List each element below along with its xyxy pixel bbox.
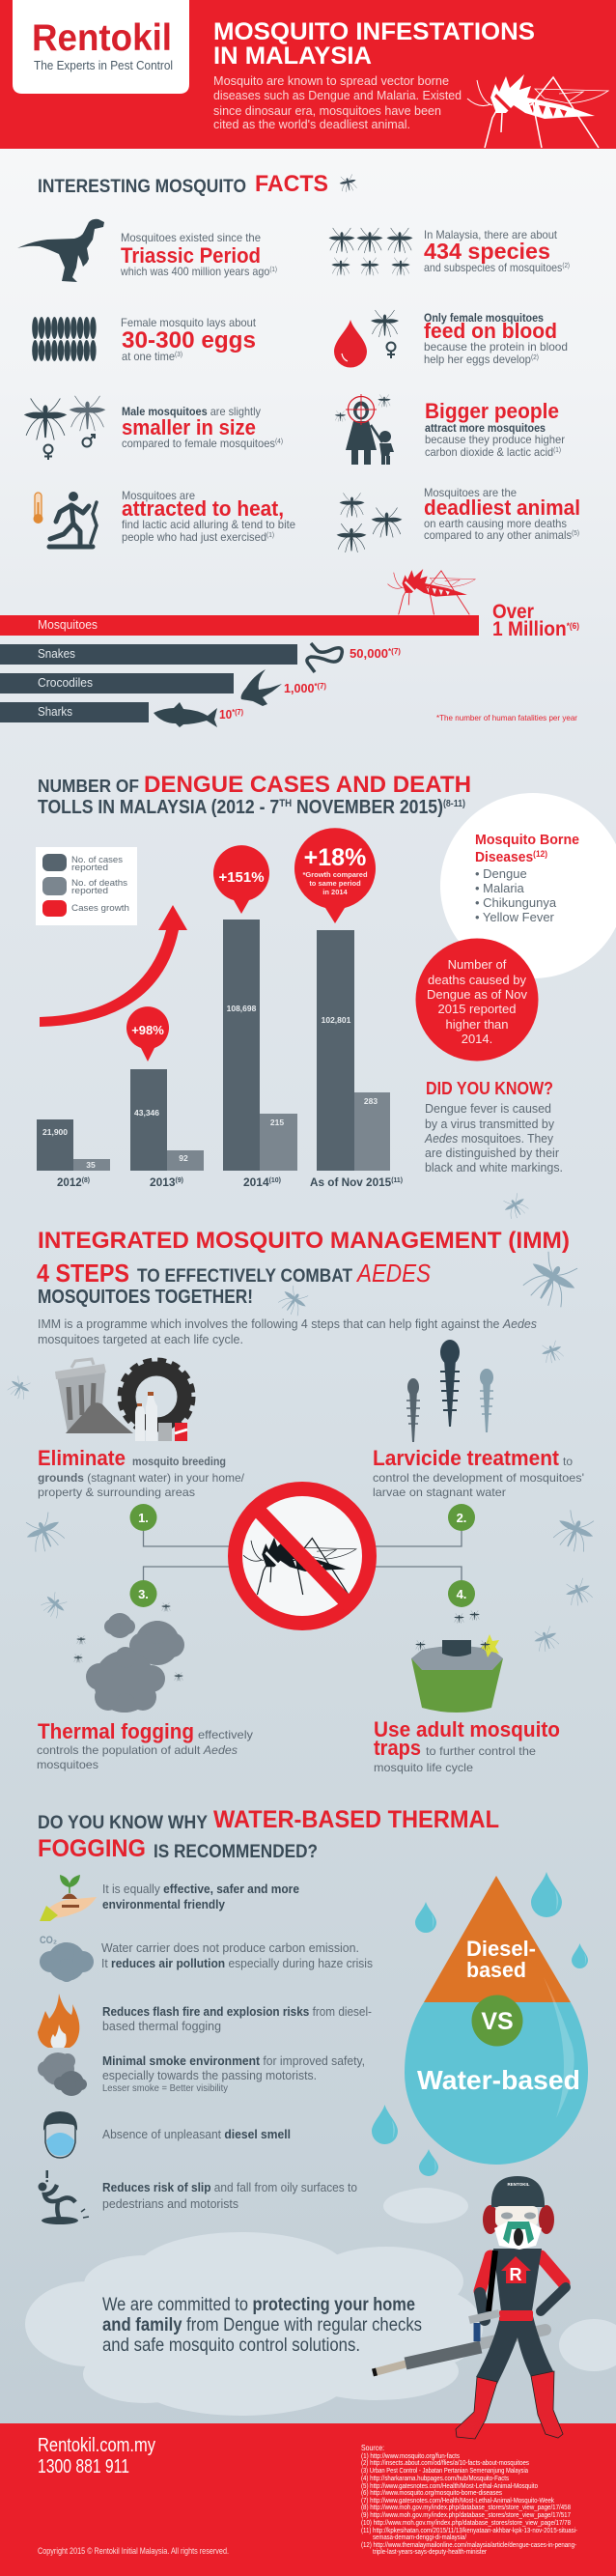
benefit: minimal smoke: Minimal smoke environment for improved safety, (102, 2053, 365, 2068)
heading: water-based fogging: IS RECOMMENDED? (154, 1842, 318, 1862)
text block: did you know: by a virus transmitted by (425, 1117, 554, 1131)
bar: snakes: *(7) (388, 647, 401, 656)
fact: smaller in size: (4) (275, 439, 283, 445)
benefit: minimal smoke (38, 2052, 365, 2096)
benefit: air pollution (40, 1935, 373, 1982)
legend: Cases growth (71, 903, 129, 914)
fact: 30-300 eggs: Female mosquito lays about (121, 316, 257, 329)
benefit: flash fire: Reduces flash fire and explosion risks from diesel- (102, 2004, 372, 2019)
sources: (3) Urban Pest Control - Jabatan Pertanian Semenanjung Malaysia (361, 2468, 528, 2475)
icon: runner on treadmill (49, 492, 97, 547)
benefit: flash fire (38, 1994, 372, 2048)
sources: (11) http://kpkesihatan.com/2015/11/13/kenyataan-akhbar-kpk-13-nov-2015-situasi- (361, 2528, 578, 2534)
icon: three mosquitoes (337, 493, 402, 552)
fact: feed on blood: (2) (531, 354, 539, 361)
heading: IMM: INTEGRATED MOSQUITO MANAGEMENT (IMM) (38, 1228, 570, 1254)
bubble: +18%: *Growth compared (302, 870, 368, 879)
callout: deaths caused by dengue: higher than (445, 1017, 509, 1032)
fact: 434 species (328, 228, 570, 275)
fact: attracted to heat (33, 489, 295, 547)
intro text: since dinosaur era, mosquitoes have been (213, 103, 441, 118)
panel: mosquito borne diseases (440, 793, 616, 978)
legend: reported (71, 863, 108, 873)
bar: sharks: *(7) (232, 708, 243, 717)
arrow: rising trend (40, 905, 187, 1027)
connector lines (143, 1531, 462, 1580)
sources: (8) http://www.moh.gov.my/index.php/database_stores/store_view_page/17/458 (361, 2505, 571, 2511)
text block: did you know: black and white markings. (425, 1160, 563, 1175)
fact: attracted to heat: (1) (266, 532, 274, 539)
heading: interesting mosquito facts: INTERESTING MOSQUITO (38, 177, 246, 197)
fact: attracted to heat: find lactic acid alluring & tend to bite (122, 518, 295, 531)
icon: woman and child target (335, 394, 394, 465)
belt (499, 2310, 533, 2321)
heading: dengue cases: TOLLS IN MALAYSIA (2012 - 7 (38, 797, 312, 818)
contact details (38, 2435, 155, 2477)
bar: sharks (0, 702, 243, 727)
bar: mosquitoes: Mosquitoes (38, 617, 98, 632)
fact: 434 species: (2) (562, 263, 570, 269)
bars 2014: 215 (270, 1118, 284, 1127)
sources: (10) http://www.moh.gov.my/index.php/database_stores/store_view_page/17/78 (361, 2520, 571, 2527)
icon: hand with plant (40, 1875, 97, 1921)
step number 2 (448, 1504, 475, 1531)
bar: mosquitoes: 1 Million (492, 618, 574, 640)
bars 2014: 2014 (243, 1175, 269, 1189)
heading: IMM: 4 STEPS (37, 1259, 129, 1288)
heading: water-based fogging: DO YOU KNOW WHY (38, 1813, 208, 1833)
footer (0, 2423, 616, 2576)
bubble: +18%: +18% (304, 844, 366, 871)
bars 2014: 108,698 (227, 1004, 257, 1013)
step number 3: 3. (138, 1587, 149, 1601)
bubble: +98% (126, 1006, 169, 1062)
callout: deaths caused by dengue (415, 939, 539, 1061)
benefit: slip risk (39, 2170, 357, 2224)
bars 2012: (8) (82, 1177, 90, 1184)
benefit: minimal smoke: especially towards the passing motorists. (102, 2068, 317, 2082)
icon: CO2 cloud (40, 1935, 94, 1982)
icon: person slipping (39, 2170, 89, 2224)
icon: CO2 cloud: CO₂ (40, 1935, 57, 1946)
panel: mosquito borne diseases: • Dengue (475, 866, 527, 881)
text block: did you know: Dengue fever is caused (425, 1101, 551, 1116)
bars 2013: 43,346 (134, 1108, 159, 1118)
arms (480, 2256, 566, 2320)
icon: white mosquito (467, 74, 608, 148)
legs (476, 2316, 554, 2384)
bar: sharks: 10 (219, 707, 233, 722)
chart: dengue cases and deaths (37, 828, 403, 1189)
bar: sharks: Sharks (38, 704, 72, 719)
header banner (0, 0, 616, 149)
text block: did you know: are distinguished by their (425, 1146, 560, 1160)
fact: 30-300 eggs: at one time (122, 350, 179, 363)
bars 2015: 283 (364, 1096, 378, 1106)
bars 2015: 102,801 (322, 1015, 351, 1025)
bars 2015: (11) (391, 1177, 403, 1184)
step text: eliminate: grounds (stagnant water) in your home/ (38, 1471, 245, 1485)
fact: attracted to heat: people who had just exercised (122, 530, 277, 544)
fact: smaller in size (24, 396, 283, 460)
step number 4: 4. (457, 1587, 466, 1601)
fact: attracted to heat: attracted to heat, (122, 496, 284, 521)
bar: mosquitoes (0, 569, 579, 640)
badge: VS (471, 1996, 523, 2046)
icon: flame (38, 1994, 79, 2048)
label: water-based: Water-based (417, 2065, 580, 2095)
icon: fog clouds (73, 1602, 184, 1713)
logo card: The Experts in Pest Control (34, 58, 173, 72)
fact: feed on blood: Only female mosquitoes (424, 311, 544, 325)
icon: face mask (43, 2111, 77, 2158)
clouds background (25, 2188, 616, 2416)
fact: smaller in size: Male mosquitoes are slightly (122, 405, 261, 418)
text block: did you know (424, 1079, 563, 1175)
badge: VS: VS (481, 2008, 514, 2035)
fact: deadliest animal: deadliest animal (424, 495, 580, 520)
decorative mosquitoes (6, 1192, 599, 1654)
heading: water-based fogging (38, 1806, 499, 1862)
icon: no mosquito sign (236, 1489, 369, 1623)
heading: dengue cases: (8-11) (443, 799, 465, 809)
panel: mosquito borne diseases: • Malaria (475, 881, 525, 895)
sources: (5) http://www.gatesnotes.com/Health/Most-Lethal-Animal-Mosquito (361, 2483, 538, 2490)
closing statement: and safe mosquito control solutions. (102, 2335, 360, 2356)
bar: crocodiles (0, 669, 326, 706)
step number 4 (448, 1580, 475, 1607)
benefit: no diesel smell (43, 2111, 291, 2158)
fact: bigger people: attract more mosquitoes (425, 421, 546, 435)
sources: (2) http://insects.about.com/od/flies/a/10-facts-about-mosquitoes (361, 2460, 529, 2467)
text block: IMM intro: IMM is a programme which involves the following 4 steps that can help fight against the Aedes (38, 1316, 537, 1331)
label: diesel-based: Diesel- (466, 1937, 536, 1961)
step number 1 (129, 1504, 156, 1531)
step number 1: 1. (138, 1511, 149, 1525)
step text: eliminate: property & surrounding areas (38, 1486, 195, 1499)
bar chart: human fatalities per year (0, 569, 579, 727)
text block: did you know: Aedes mosquitoes. They (424, 1131, 553, 1146)
copyright: Copyright 2015 © Rentokil Initial Malaysia. All rights reserved. (38, 2546, 229, 2557)
text block: IMM intro (38, 1316, 537, 1346)
step text: eliminate: Eliminate (38, 1446, 126, 1470)
panel: mosquito borne diseases: (12) (533, 849, 547, 859)
bars 2013: 92 (179, 1153, 188, 1163)
fact: bigger people (335, 394, 565, 465)
sources: (4) http://sharkarama.hubpages.com/hub/Mosquito-Facts (361, 2476, 509, 2482)
bar: snakes (0, 643, 401, 672)
bars 2014: (10) (269, 1177, 281, 1184)
step text: thermal fogging: effectively (198, 1728, 253, 1741)
icon: smoke (38, 2052, 87, 2096)
fact: deadliest animal: (5) (572, 530, 579, 537)
step text: adult traps: traps (374, 1736, 421, 1760)
heading: IMM: MOSQUITOES TOGETHER! (38, 1287, 253, 1308)
head and helmet: RENTOKIL (508, 2182, 530, 2187)
step text: adult traps (374, 1717, 560, 1774)
intro text: diseases such as Dengue and Malaria. Existed (213, 88, 462, 102)
step text: eliminate (38, 1446, 245, 1499)
bubble: +151%: +151% (218, 869, 265, 886)
label: diesel-based: based (466, 1958, 526, 1982)
fact: triassic period (17, 219, 277, 282)
callout: deaths caused by dengue: Dengue as of Nov (427, 987, 528, 1002)
icon: blood drop (334, 320, 367, 367)
panel: mosquito borne diseases: Mosquito Borne (475, 832, 579, 848)
intro text: Mosquito are known to spread vector borne (213, 73, 449, 88)
bar: mosquitoes: *(6) (567, 621, 579, 631)
legend (36, 847, 137, 925)
heading: dengue cases: NUMBER OF (38, 777, 139, 796)
bars 2012: 35 (86, 1160, 96, 1170)
icon: rubbish bin, tyre and bottles (55, 1359, 193, 1441)
text block: did you know: DID YOU KNOW? (426, 1079, 553, 1098)
bar: crocodiles: *(7) (315, 682, 326, 691)
step text: larvicide (373, 1446, 584, 1499)
logo card: Rentokil (32, 17, 172, 59)
sources (361, 2443, 578, 2556)
fact: 434 species: and subspecies of mosquitoes (424, 261, 579, 274)
sources: (7) http://www.gatesnotes.com/Health/Most-Lethal-Animal-Mosquito-Week (361, 2498, 554, 2505)
fact: triassic period: Triassic Period (121, 243, 261, 268)
benefit: slip risk: Reduces risk of slip and fall from oily surfaces to (102, 2180, 357, 2194)
fact: bigger people: Bigger people (425, 399, 559, 423)
footnote: *The number of human fatalities per year (436, 713, 577, 722)
panel: mosquito borne diseases: Diseases (475, 849, 538, 865)
callout: deaths caused by dengue: Number of (448, 957, 507, 972)
title (213, 18, 535, 70)
bars 2012: 2012 (57, 1175, 83, 1189)
icon: small water drops (372, 1872, 588, 2176)
fact: triassic period: which was 400 million years ago (121, 265, 287, 278)
icon: eggs (32, 317, 97, 361)
contact details: 1300 881 911 (38, 2456, 129, 2477)
icon: larvae (406, 1340, 493, 1442)
step text: adult traps: mosquito life cycle (374, 1761, 473, 1774)
benefit: environmental: environmental friendly (102, 1897, 226, 1911)
fact: bigger people: (1) (553, 447, 561, 454)
step text: larvicide: to (563, 1455, 573, 1468)
heading: water-based fogging: WATER-BASED THERMAL (213, 1806, 499, 1833)
title: MOSQUITO INFESTATIONS (213, 18, 535, 45)
fact: deadliest animal: Mosquitoes are the (424, 486, 517, 499)
sources: (9) http://www.moh.gov.my/index.php/database_stores/store_view_page/17/517 (361, 2512, 571, 2519)
bars 2014 (223, 920, 297, 1189)
bars 2015: As of Nov 2015 (310, 1175, 393, 1189)
heading: IMM (37, 1228, 570, 1308)
benefit: no diesel smell: Absence of unpleasant diesel smell (102, 2127, 291, 2141)
heading: dengue cases (38, 772, 471, 818)
legend: No. of cases (71, 855, 123, 865)
fact: triassic period: Mosquitoes existed since the (121, 231, 261, 244)
bar: crocodiles: 1,000 (284, 681, 316, 695)
step text: thermal fogging: controls the population of adult Aedes (37, 1743, 238, 1757)
panel: mosquito borne diseases: • Yellow Fever (475, 910, 555, 924)
benefit: flash fire: based thermal fogging (102, 2019, 221, 2033)
fact: feed on blood (334, 310, 568, 367)
bars 2013 (130, 1069, 204, 1189)
step number 3 (129, 1580, 156, 1607)
heading: interesting mosquito facts (38, 171, 358, 197)
heading: dengue cases: DENGUE CASES AND DEATH (144, 772, 471, 798)
fogger nozzle (373, 2347, 481, 2372)
step text: eliminate: mosquito breeding (132, 1455, 226, 1468)
bar: snakes: 50,000 (350, 646, 388, 661)
fogger tank (479, 2330, 546, 2344)
benefit: air pollution: Water carrier does not produce carbon emission. (101, 1940, 359, 1955)
bar: crocodiles: Crocodiles (38, 675, 93, 690)
fact: feed on blood: feed on blood (424, 319, 557, 343)
heading: water-based fogging: FOGGING (38, 1835, 146, 1862)
bubble: +18%: to same period (309, 879, 361, 888)
bars 2015 (310, 930, 403, 1189)
bar: mosquitoes: Over (492, 601, 534, 623)
fact: deadliest animal (337, 486, 580, 552)
fact: smaller in size: smaller in size (122, 415, 256, 439)
icon: dinosaur (17, 219, 104, 282)
torso (493, 2249, 542, 2311)
panel: mosquito borne diseases: • Chikungunya (475, 895, 557, 910)
fogger handle (469, 2313, 499, 2341)
fact: feed on blood: because the protein in blood (424, 340, 568, 354)
heading: IMM: AEDES (355, 1259, 432, 1288)
fact: deadliest animal: compared to any other animals (424, 528, 583, 542)
fact: attracted to heat: Mosquitoes are (122, 489, 195, 502)
heading: interesting mosquito facts: FACTS (255, 171, 328, 197)
illustration: pest controller with fogger (373, 2176, 566, 2439)
fact: 434 species: 434 species (424, 239, 550, 264)
icon: mosquito trap (411, 1610, 503, 1713)
callout: deaths caused by dengue: 2014. (462, 1032, 492, 1046)
step text: adult traps: Use adult mosquito (374, 1717, 560, 1741)
bars 2013: 2013 (150, 1175, 176, 1189)
chart: diesel vs water drop (405, 1876, 588, 2165)
heading: IMM: TO EFFECTIVELY COMBAT (137, 1266, 352, 1287)
fact: 30-300 eggs (32, 316, 257, 363)
head and helmet (483, 2176, 554, 2250)
bars 2012 (37, 1119, 110, 1189)
label: diesel-based (466, 1937, 536, 1982)
fact: triassic period: (1) (269, 267, 277, 273)
bubble: +98%: +98% (131, 1023, 164, 1037)
sources: Source: (361, 2443, 384, 2452)
heading: dengue cases: NOVEMBER 2015) (292, 797, 443, 818)
fact: feed on blood: help her eggs develop (424, 353, 538, 366)
fact: deadliest animal: on earth causing more deaths (424, 517, 567, 530)
step text: adult traps: to further control the (426, 1744, 536, 1758)
sources: (1) http://www.mosquito.org/fun-facts (361, 2453, 460, 2460)
benefit: air pollution: It reduces air pollution especially during haze crisis (101, 1956, 373, 1970)
bubble: +151% (213, 845, 269, 914)
house logo: R (510, 2265, 521, 2284)
bars 2012: 21,900 (42, 1127, 68, 1137)
sources: (6) http://www.mosquito.org/mosquito-borne-diseases (361, 2490, 502, 2497)
boots (456, 2371, 563, 2439)
step text: larvicide: larvae on stagnant water (373, 1486, 506, 1499)
bubble: +18%: in 2014 (322, 888, 349, 896)
step number 2: 2. (457, 1511, 466, 1525)
bars 2013: (9) (176, 1177, 183, 1184)
strap (489, 2250, 495, 2311)
step text: larvicide: control the development of mosquitoes' (373, 1471, 584, 1485)
fact: 30-300 eggs: 30-300 eggs (122, 327, 256, 354)
bubble: +18% (294, 828, 376, 923)
legend: reported (71, 886, 108, 896)
step text: thermal fogging (37, 1719, 253, 1771)
step text: larvicide: Larvicide treatment (373, 1446, 560, 1470)
fact: 30-300 eggs: (3) (175, 352, 182, 358)
bar: snakes: Snakes (38, 646, 75, 661)
step text: thermal fogging: Thermal fogging (38, 1719, 194, 1743)
fact: 434 species: In Malaysia, there are about (424, 228, 558, 241)
intro text: cited as the world's deadliest animal. (213, 117, 410, 131)
sources: (12) http://www.themalaymailonline.com/malaysia/article/dengue-cases-in-penang- (361, 2542, 577, 2549)
fact: bigger people: carbon dioxide & lactic acid (425, 445, 565, 459)
house logo (501, 2256, 531, 2284)
closing statement: and family from Dengue with regular checks (102, 2315, 422, 2335)
callout: deaths caused by dengue: 2015 reported (438, 1002, 516, 1016)
benefit: slip risk: pedestrians and motorists (102, 2196, 238, 2211)
sources: semasa-demam-denggi-di-malaysia/ (373, 2534, 466, 2541)
icon: six mosquitoes (328, 228, 413, 275)
closing statement (102, 2295, 422, 2356)
contact details: Rentokil.com.my (38, 2435, 155, 2456)
callout: deaths caused by dengue: deaths caused by (428, 973, 526, 987)
benefit: minimal smoke: Lesser smoke = Better visibility (102, 2083, 228, 2094)
fact: smaller in size: compared to female mosquitoes (122, 437, 287, 450)
icon: thermometer (33, 493, 42, 524)
closing statement: We are committed to protecting your home (102, 2295, 415, 2315)
step text: thermal fogging: mosquitoes (37, 1758, 98, 1771)
icon: female mosquito (371, 310, 399, 358)
benefit: environmental: It is equally effective, safer and more (102, 1882, 299, 1896)
title: IN MALAYSIA (213, 42, 372, 70)
sources: triple-last-years-says-deputy-health-minister (373, 2549, 488, 2556)
icon: male and female mosquitoes (24, 396, 105, 460)
text block: IMM intro: mosquitoes targeted at each life cycle. (38, 1332, 243, 1346)
fact: bigger people: because they produce higher (425, 433, 565, 446)
intro text (213, 73, 462, 131)
heading: dengue cases: TH (279, 798, 292, 809)
benefit: environmental (40, 1875, 299, 1921)
legend: No. of deaths (71, 878, 127, 889)
logo card (13, 0, 189, 94)
